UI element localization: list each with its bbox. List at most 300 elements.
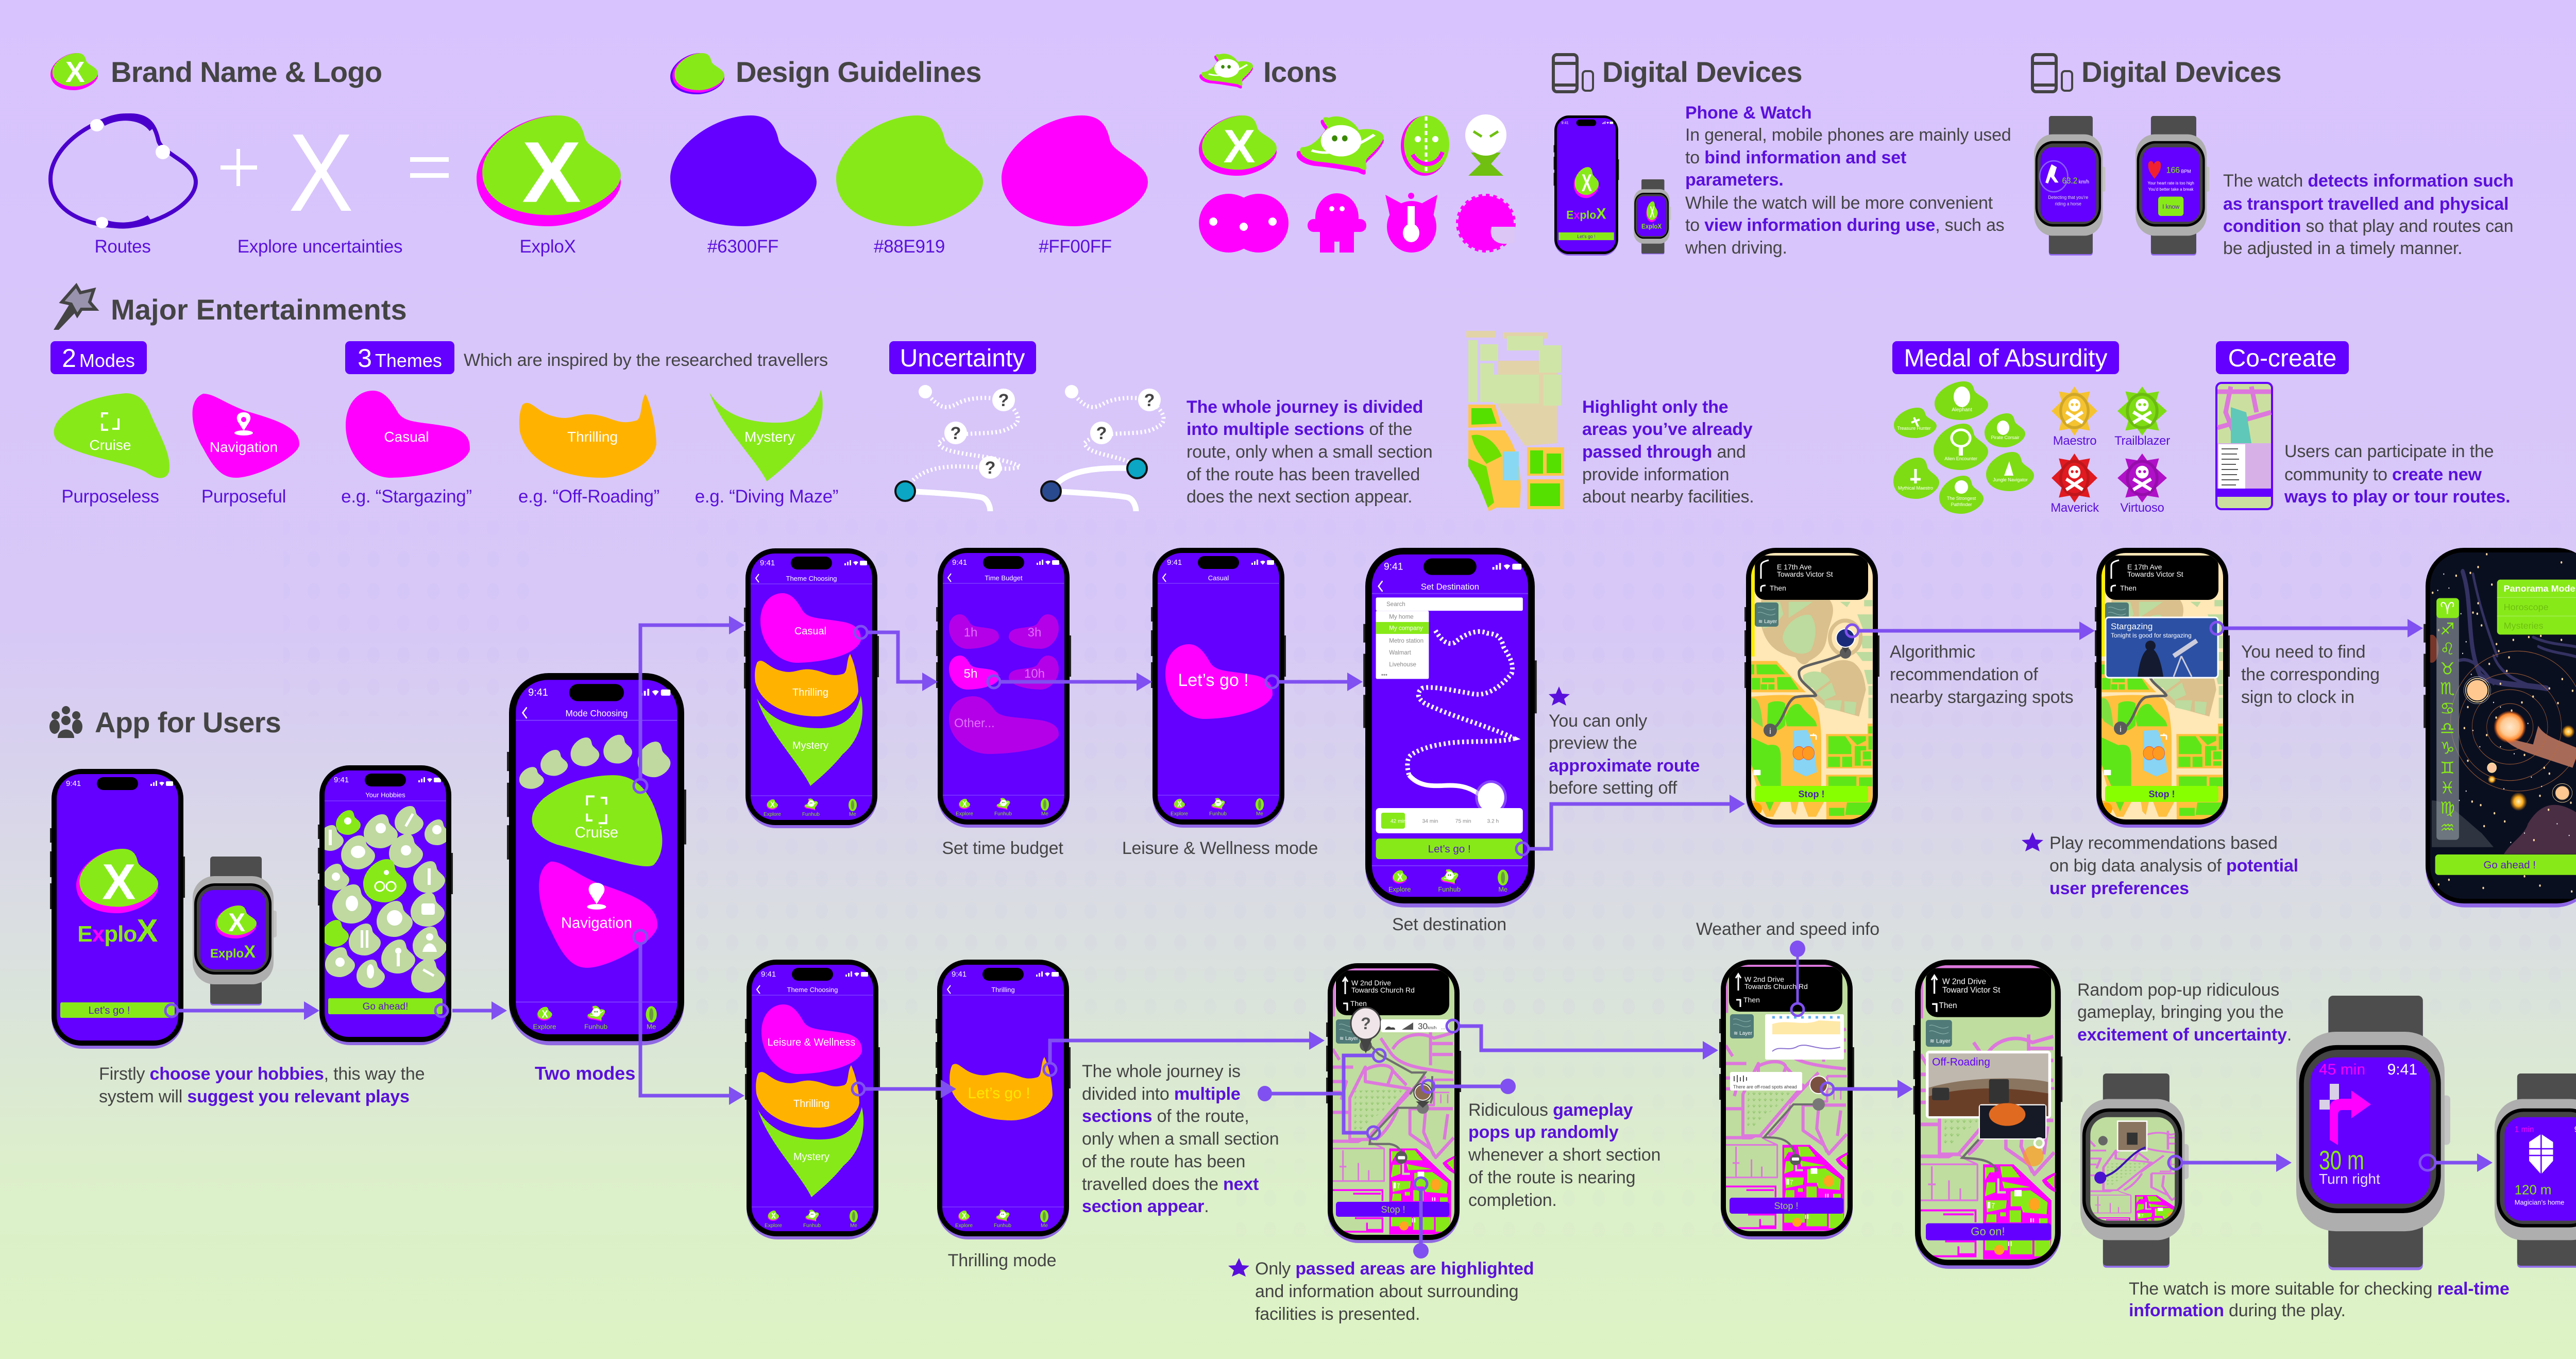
text: watch detects information: as transport travelled and physical <box>2223 194 2509 214</box>
phone: thrilling: Let’s go ! <box>968 1085 1030 1102</box>
diagram: route after <box>1041 385 1164 511</box>
watch: speed: Detecting that you’re <box>2048 195 2088 200</box>
mode: cruise: Cruise <box>575 825 618 841</box>
diagram: route after: ? <box>1096 424 1107 443</box>
phone: splash <box>50 769 185 1049</box>
arrow: weather to off-roading <box>1821 1080 1913 1098</box>
badge: trailblazer <box>2114 387 2170 448</box>
phone: your hobbies: Your Hobbies <box>365 791 405 799</box>
heading: app for users: App for Users <box>95 706 281 739</box>
text: users participate: Users can participate in the <box>2284 442 2494 461</box>
note: random pop-up: . <box>2287 1025 2292 1045</box>
blob: thrilling: Thrilling <box>567 429 618 445</box>
swatch: green <box>836 115 983 226</box>
button: Let’s go ! <box>89 1005 130 1016</box>
label: explore uncertainties: Explore uncertainties <box>238 237 402 257</box>
phone: mode choosing: Mode Choosing <box>566 708 628 718</box>
icon: X logo <box>1199 115 1277 176</box>
phone: ExploX splash small: ExploX <box>1566 205 1606 223</box>
icon: equals <box>410 157 449 178</box>
note: random pop-up: Random pop-up ridiculous <box>2077 980 2279 1000</box>
phone: thrilling: Thrilling <box>991 986 1015 994</box>
caption: hobbies: system will <box>99 1087 187 1106</box>
heading: digital devices: Digital Devices <box>2081 56 2281 88</box>
stargazing card <box>2106 617 2218 678</box>
phone: time budget: 1h <box>964 626 977 640</box>
note: passed areas: and information about surrounding <box>1255 1282 1518 1301</box>
label: routes: Routes <box>94 237 151 257</box>
phone: theme choosing top: Theme Choosing <box>786 575 837 582</box>
tag: 3 themes: 3Themes <box>358 344 442 373</box>
heading: icons: Icons <box>1263 56 1337 88</box>
mode: navigation <box>539 862 657 968</box>
zodiac strip: ♉ <box>2440 659 2455 678</box>
heading: digital devices: Digital Devices <box>1602 56 1802 88</box>
watch: small <box>1634 179 1671 254</box>
heading: brand name and logo: Brand Name & Logo <box>111 56 382 88</box>
watch: map <box>2080 1073 2194 1268</box>
badge: maestro <box>2052 387 2097 448</box>
arrow: speed info to weather <box>1447 1020 1718 1060</box>
panel: medal of absurdity <box>1892 341 2170 515</box>
note: passed areas: passed areas are highlighted <box>1295 1259 1534 1279</box>
zodiac strip <box>2436 598 2459 840</box>
panel: highlight areas <box>1466 331 1754 511</box>
search menu <box>1376 597 1523 679</box>
phone: time budget <box>936 548 1071 828</box>
note: real-time information: The watch is more suitable for checking <box>2129 1279 2437 1299</box>
text: users participate: ways to play or tour routes. <box>2284 487 2510 507</box>
zodiac strip: ♌ <box>2440 639 2455 659</box>
phone: weather and speed: Stop ! <box>1774 1201 1799 1211</box>
text: highlight passed areas: Highlight only the <box>1582 397 1728 417</box>
icon: route loop <box>50 115 196 228</box>
text: phone and watch: While the watch will be more convenient <box>1685 193 1993 213</box>
watch: speed <box>2034 116 2106 256</box>
phone: map route <box>1744 546 1880 828</box>
swatch: magenta <box>1002 115 1148 226</box>
text: watch detects information: detects information such <box>2308 171 2514 191</box>
phone: your hobbies: Go ahead! <box>363 1001 408 1012</box>
phone: time budget: 3h <box>1028 626 1041 640</box>
note: play recommendations: potential <box>2226 856 2298 876</box>
note: multiple sections: only when a small section <box>1082 1129 1279 1149</box>
note: multiple sections: divided into <box>1082 1084 1174 1104</box>
phone: time budget: 5h <box>964 667 977 681</box>
arrow: time budget to casual <box>988 673 1152 691</box>
phone: off-roading popup: W 2nd Drive <box>1942 978 1986 986</box>
search menu: Metro station <box>1389 638 1423 644</box>
panel: major entertainments <box>50 286 838 507</box>
label: off-roading: e.g. “Off-Roading” <box>518 486 659 507</box>
mode menu: Horoscope <box>2504 602 2549 612</box>
note: ridiculous gameplay: pops up randomly <box>1468 1122 1619 1142</box>
diagram: route before: ? <box>951 424 961 443</box>
icon: magic wand <box>54 286 96 330</box>
note: multiple sections: . <box>1204 1197 1209 1216</box>
blob: mystery <box>709 390 823 481</box>
button <box>60 1002 175 1018</box>
panel: uncertainty <box>889 341 1432 511</box>
arrow: cruise to themes <box>634 616 744 793</box>
phone: map route: i <box>1769 727 1771 736</box>
icon: spiky circle <box>1458 196 1515 250</box>
badge: virtuoso <box>2117 454 2167 515</box>
tag: medal of absurdity: Medal of Absurdity <box>1904 345 2107 372</box>
text: watch detects information: The watch <box>2223 171 2308 191</box>
icon: layered blob <box>670 53 724 94</box>
label: green hex: #88E919 <box>874 237 945 257</box>
icon: star <box>1549 686 1570 706</box>
medal blobs: Alephant <box>1952 407 1972 413</box>
blob: navigation: Navigation <box>210 439 278 455</box>
weather card <box>1765 1014 1844 1060</box>
icon: star <box>2022 832 2043 851</box>
blob: thrilling <box>519 394 656 478</box>
text: highlight passed areas: passed through <box>1582 442 1712 462</box>
note: clock in: the corresponding <box>2241 665 2380 684</box>
phone: off-roading popup: Then <box>1939 1001 1957 1010</box>
phone: mode choosing <box>507 673 686 1045</box>
medal blobs: Pirate Corsair <box>1991 435 2020 440</box>
caption: hobbies: Firstly choose your hobbies, this way the <box>99 1064 425 1084</box>
diagram: route after: ? <box>1144 391 1155 410</box>
phone: casual let's go: Let’s go ! <box>1178 670 1249 690</box>
medal blobs: Mythical Maestro <box>1898 485 1933 491</box>
blob: navigation <box>193 394 299 478</box>
text: highlight passed areas: provide information <box>1582 465 1729 484</box>
label: diving maze: e.g. “Diving Maze” <box>695 486 838 507</box>
off-roading photo card <box>1926 1051 2051 1118</box>
watch: splash: ExploX <box>210 942 256 962</box>
note: algorithmic recommendation: nearby stargazing spots <box>1890 687 2073 707</box>
phone: theme choosing bottom <box>745 960 880 1239</box>
phone: map route: Stop ! <box>1798 789 1825 799</box>
note: real-time information: real-time <box>2437 1279 2510 1299</box>
watch: heart rate <box>2136 116 2209 256</box>
note: multiple sections: travelled does the <box>1082 1175 1223 1194</box>
watch text: distance: 30 m <box>2319 1146 2364 1176</box>
phone: theme choosing bottom: Leisure & Wellness <box>768 1037 855 1048</box>
zodiac strip: ♒ <box>2440 818 2455 837</box>
zodiac strip: ♓ <box>2440 778 2455 798</box>
note: play recommendations: on big data analysis of <box>2049 856 2226 876</box>
icon: saucer <box>1297 116 1384 175</box>
panel: design guidelines <box>670 53 1148 257</box>
callout: multiple sections bracket <box>1258 1049 1385 1139</box>
note: ridiculous gameplay: Ridiculous <box>1468 1100 1553 1120</box>
phone: theme choosing top: Mystery <box>792 740 828 751</box>
logo: ExploX <box>477 115 621 226</box>
text: phone and watch: bind information and set <box>1704 148 1906 167</box>
text: journey divided: of the route has been travelled <box>1187 465 1420 484</box>
callout: gameplay pin <box>1422 1079 1516 1094</box>
note: approximate route: You can only <box>1549 711 1647 731</box>
diagram: route before <box>895 385 1020 511</box>
note: multiple sections: of the route, <box>1152 1106 1249 1126</box>
phone: time budget: 10h <box>1024 667 1045 681</box>
note: random pop-up: excitement of uncertainty <box>2077 1025 2287 1045</box>
phone: set destination: Set Destination <box>1421 582 1479 592</box>
search menu: ••• <box>1381 673 1387 679</box>
phone: theme choosing bottom: Theme Choosing <box>787 986 838 994</box>
callout: weather pin <box>1790 941 1805 1016</box>
zodiac strip: ♋ <box>2440 699 2455 718</box>
watch: speed: 63.2 km/h <box>2062 176 2089 186</box>
medal blobs: Treasure Hunter <box>1897 426 1931 431</box>
phone: map gameplay: 30km/h <box>1418 1021 1436 1031</box>
phone: stargazing card: i <box>2120 725 2122 734</box>
note: multiple sections: next <box>1223 1175 1259 1194</box>
watch: magician's home: 120 m <box>2515 1183 2551 1198</box>
zodiac strip: ♎ <box>2440 718 2455 738</box>
watch: heart rate: I know <box>2162 203 2180 210</box>
icon: star <box>1228 1258 1249 1277</box>
text: users participate: community to <box>2284 465 2392 484</box>
phone: off-roading popup <box>1911 954 2065 1269</box>
note: algorithmic recommendation: recommendation of <box>1890 665 2038 684</box>
zodiac strip: ♈ <box>2440 599 2455 618</box>
blob: cruise <box>54 393 170 478</box>
phone: map gameplay <box>1324 959 1463 1243</box>
text: phone and watch: when driving. <box>1685 238 1787 258</box>
panel: icons <box>1199 54 1515 253</box>
mode: cruise <box>532 775 662 866</box>
mode menu: Panorama Mode <box>2504 583 2575 594</box>
phone: off-roading popup: Toward Victor St <box>1942 986 2001 995</box>
caption: set time budget: Set time budget <box>942 838 1063 858</box>
note: ridiculous gameplay: gameplay <box>1553 1100 1633 1120</box>
phone: time budget: Time Budget <box>985 574 1023 582</box>
medal blobs: Jungle Navigator <box>1993 477 2028 482</box>
badge: trailblazer: Trailblazer <box>2114 434 2170 448</box>
text: journey divided: does the next section appear. <box>1187 487 1412 507</box>
wordmark: ExploX <box>77 913 158 949</box>
logo <box>76 849 158 913</box>
watch: magician's home: 1 min <box>2515 1125 2534 1134</box>
phone: ExploX splash small: Let’s go ! <box>1577 234 1596 239</box>
phone: ExploX splash small <box>1554 115 1619 256</box>
arrow: splash to hobbies <box>165 1001 319 1020</box>
phone: weather and speed <box>1717 955 1856 1239</box>
phone: stargazing card <box>2094 546 2231 828</box>
icon: turn arrow <box>2319 1084 2371 1145</box>
icon: phone and watch outline <box>1553 55 1593 92</box>
note: ridiculous gameplay: whenever a short section <box>1468 1145 1660 1165</box>
arrow: navigation to themes <box>634 930 744 1105</box>
note: clock in: sign to clock in <box>2241 687 2354 707</box>
note: random pop-up: gameplay, bringing you the <box>2077 1002 2284 1022</box>
watch text: 45 min: 45 min <box>2319 1061 2365 1078</box>
button: Let’s go ! <box>1428 843 1471 855</box>
icon: yeti <box>1308 193 1366 253</box>
label: ExploX: ExploX <box>519 237 576 257</box>
note: multiple sections: of the route has been <box>1082 1152 1245 1171</box>
transport options <box>1376 808 1523 833</box>
phone: community map <box>2216 383 2272 509</box>
phone: theme choosing top: Thrilling <box>792 687 828 698</box>
phone: your hobbies <box>318 765 453 1045</box>
icon: phone and watch outline <box>2032 55 2072 92</box>
text: phone and watch: parameters. <box>1685 170 1784 190</box>
text: phone and watch: to <box>1685 148 1704 167</box>
letter X: X <box>289 110 353 234</box>
panel: digital devices watch <box>2032 55 2514 258</box>
text: phone and watch: view information during use, such as <box>1704 215 2004 235</box>
watch: heart rate: You’d better take a break <box>2148 187 2194 192</box>
zodiac strip: ♑ <box>2440 739 2455 758</box>
watch: heart rate: 166 BPM <box>2166 165 2191 175</box>
zodiac strip: ♐ <box>2440 619 2455 639</box>
watch: magician's home <box>2495 1073 2576 1268</box>
text: journey divided: of the <box>1364 420 1412 439</box>
tag: uncertainty: Uncertainty <box>900 345 1025 372</box>
icon: green pod <box>1401 115 1449 176</box>
voice bubble: There are off-road spots ahead <box>1733 1084 1797 1089</box>
note: multiple sections: The whole journey is <box>1082 1062 1241 1081</box>
blob: cruise: Cruise <box>90 437 131 453</box>
transport options: 75 min <box>1455 818 1471 824</box>
text: highlight passed areas: about nearby facilities. <box>1582 487 1754 507</box>
heading: major entertainments: Major Entertainments <box>111 293 406 326</box>
transport options: 34 min <box>1422 818 1438 824</box>
watch: splash <box>193 857 277 1005</box>
icon: users group <box>49 706 82 738</box>
arrow: hobbies to modes <box>435 1001 507 1020</box>
search menu: Search <box>1386 601 1405 608</box>
label: magenta hex: #FF00FF <box>1039 237 1112 257</box>
phone: map gameplay: Stop ! <box>1381 1204 1405 1215</box>
phone: theme choosing bottom: Thrilling <box>793 1098 829 1110</box>
label: purposeful: Purposeful <box>201 486 286 507</box>
phone: theme choosing top <box>744 548 879 828</box>
caption: weather and speed info: Weather and speed info <box>1696 919 1879 939</box>
text: themes note: Which are inspired by the researched travellers <box>464 350 828 370</box>
note: multiple sections: multiple <box>1174 1084 1241 1104</box>
transport options: 3.2 h <box>1487 818 1499 824</box>
note: play recommendations: Play recommendations based <box>2049 833 2278 853</box>
zodiac strip: ♍ <box>2440 798 2455 817</box>
voice bubble <box>1730 1072 1802 1090</box>
badge: virtuoso: Virtuoso <box>2120 501 2164 515</box>
mode menu <box>2497 580 2576 634</box>
icon: three lobe cloud <box>1199 194 1289 253</box>
text: journey divided: into multiple sections <box>1187 420 1364 439</box>
arrow: watch map to turn right <box>2168 1153 2292 1172</box>
watch text: time: 9:41 <box>2387 1061 2417 1078</box>
phone: set destination <box>1363 548 1537 908</box>
text: watch detects information: so that play and routes can <box>2301 216 2513 236</box>
arrow: thrilling to mode <box>852 1080 956 1098</box>
map: highlighted route <box>1466 331 1564 511</box>
medal blobs: The Strongest <box>1947 496 1976 501</box>
mode: navigation: Navigation <box>561 915 632 932</box>
phone: off-roading popup: Go on! <box>1971 1225 2005 1238</box>
note: multiple sections: sections <box>1082 1106 1152 1126</box>
caption: two modes: Two modes <box>535 1063 635 1084</box>
text: watch detects information: condition <box>2223 216 2301 236</box>
note: approximate route: approximate route <box>1549 756 1700 776</box>
note: real-time information: during the play. <box>2224 1301 2346 1320</box>
caption: hobbies: suggest you relevant plays <box>187 1087 410 1106</box>
text: phone and watch: In general, mobile phones are mainly used <box>1685 125 2011 145</box>
text: users participate: create new <box>2392 465 2482 484</box>
diagram: route before: ? <box>998 391 1009 410</box>
watch: heart rate: Your heart rate is too high <box>2147 181 2194 186</box>
arrow: casual to time budget <box>855 626 938 691</box>
search menu: Livehouse <box>1389 662 1416 668</box>
text: phone and watch: to <box>1685 215 1704 235</box>
bonfire photo <box>1979 1103 2046 1139</box>
arrow: stargazing to horoscope <box>2211 619 2423 637</box>
tag: 2 modes: 2Modes <box>62 344 135 373</box>
text: highlight passed areas: areas you’ve already <box>1582 420 1753 439</box>
watch text: turn right: Turn right <box>2319 1171 2380 1187</box>
note: multiple sections: section appear <box>1082 1197 1204 1216</box>
arrow: destination to map <box>1516 795 1745 855</box>
caption: set destination: Set destination <box>1392 915 1506 934</box>
off-roading photo card: Off-Roading <box>1932 1056 1990 1068</box>
text: journey divided: The whole journey is divided <box>1187 397 1423 417</box>
phone: casual let's go: Casual <box>1208 574 1229 582</box>
toes <box>519 735 670 789</box>
search menu: My home <box>1389 614 1414 620</box>
heading: design guidelines: Design Guidelines <box>736 56 981 88</box>
label: purposeless: Purposeless <box>61 486 159 507</box>
tag: 2 modes <box>50 341 147 374</box>
phone: casual let's go <box>1151 548 1286 828</box>
note: ridiculous gameplay: of the route is nearing <box>1468 1168 1635 1187</box>
badge: maverick: Maverick <box>2050 501 2099 515</box>
blob: casual: Casual <box>384 429 429 445</box>
phone: time budget: Other... <box>954 716 995 730</box>
search menu: Walmart <box>1389 650 1412 656</box>
note: play recommendations: user preferences <box>2049 879 2189 898</box>
text: highlight passed areas: and <box>1712 442 1746 462</box>
badge: maverick <box>2050 454 2099 515</box>
watch: magician's home: Magician’s home <box>2515 1198 2564 1206</box>
label: stargazing: e.g. “Stargazing” <box>341 486 472 507</box>
caption: leisure and wellness mode: Leisure & Wellness mode <box>1122 838 1318 858</box>
phone: theme choosing bottom: Mystery <box>793 1151 829 1163</box>
watch: small: ExploX <box>1641 223 1662 230</box>
button <box>1376 838 1523 859</box>
arrow: thrilling mode to map <box>1044 1031 1325 1076</box>
label: purple hex: #6300FF <box>707 237 778 257</box>
icon: brand logo <box>50 53 98 90</box>
icon: saucer heading <box>1199 54 1253 89</box>
arrow: map to stargazing <box>1846 622 2095 640</box>
note: algorithmic recommendation: Algorithmic <box>1890 642 1975 662</box>
zodiac strip: ♊ <box>2440 758 2455 778</box>
text: watch detects information: be adjusted in a timely manner. <box>2223 239 2462 258</box>
icon: bear <box>1385 193 1437 253</box>
tag: co-create <box>2216 341 2349 374</box>
badge: maestro: Maestro <box>2053 434 2096 448</box>
caption: thrilling mode: Thrilling mode <box>948 1251 1056 1270</box>
note: clock in: You need to find <box>2241 642 2365 662</box>
panel: brand name and logo <box>50 53 621 257</box>
zodiac strip: ♏ <box>2440 679 2455 698</box>
phone: map gameplay: ? <box>1361 1014 1371 1033</box>
stargazing card: Tonight is good for stargazing <box>2111 632 2192 639</box>
phone: stargazing card: Stop ! <box>2148 789 2175 799</box>
phone: thrilling <box>936 960 1071 1239</box>
note: approximate route: before setting off <box>1549 778 1677 798</box>
phone: map gameplay: ... <box>1441 1025 1445 1031</box>
search menu: My company <box>1389 625 1423 631</box>
panel: digital devices phone and watch <box>1553 55 2011 258</box>
